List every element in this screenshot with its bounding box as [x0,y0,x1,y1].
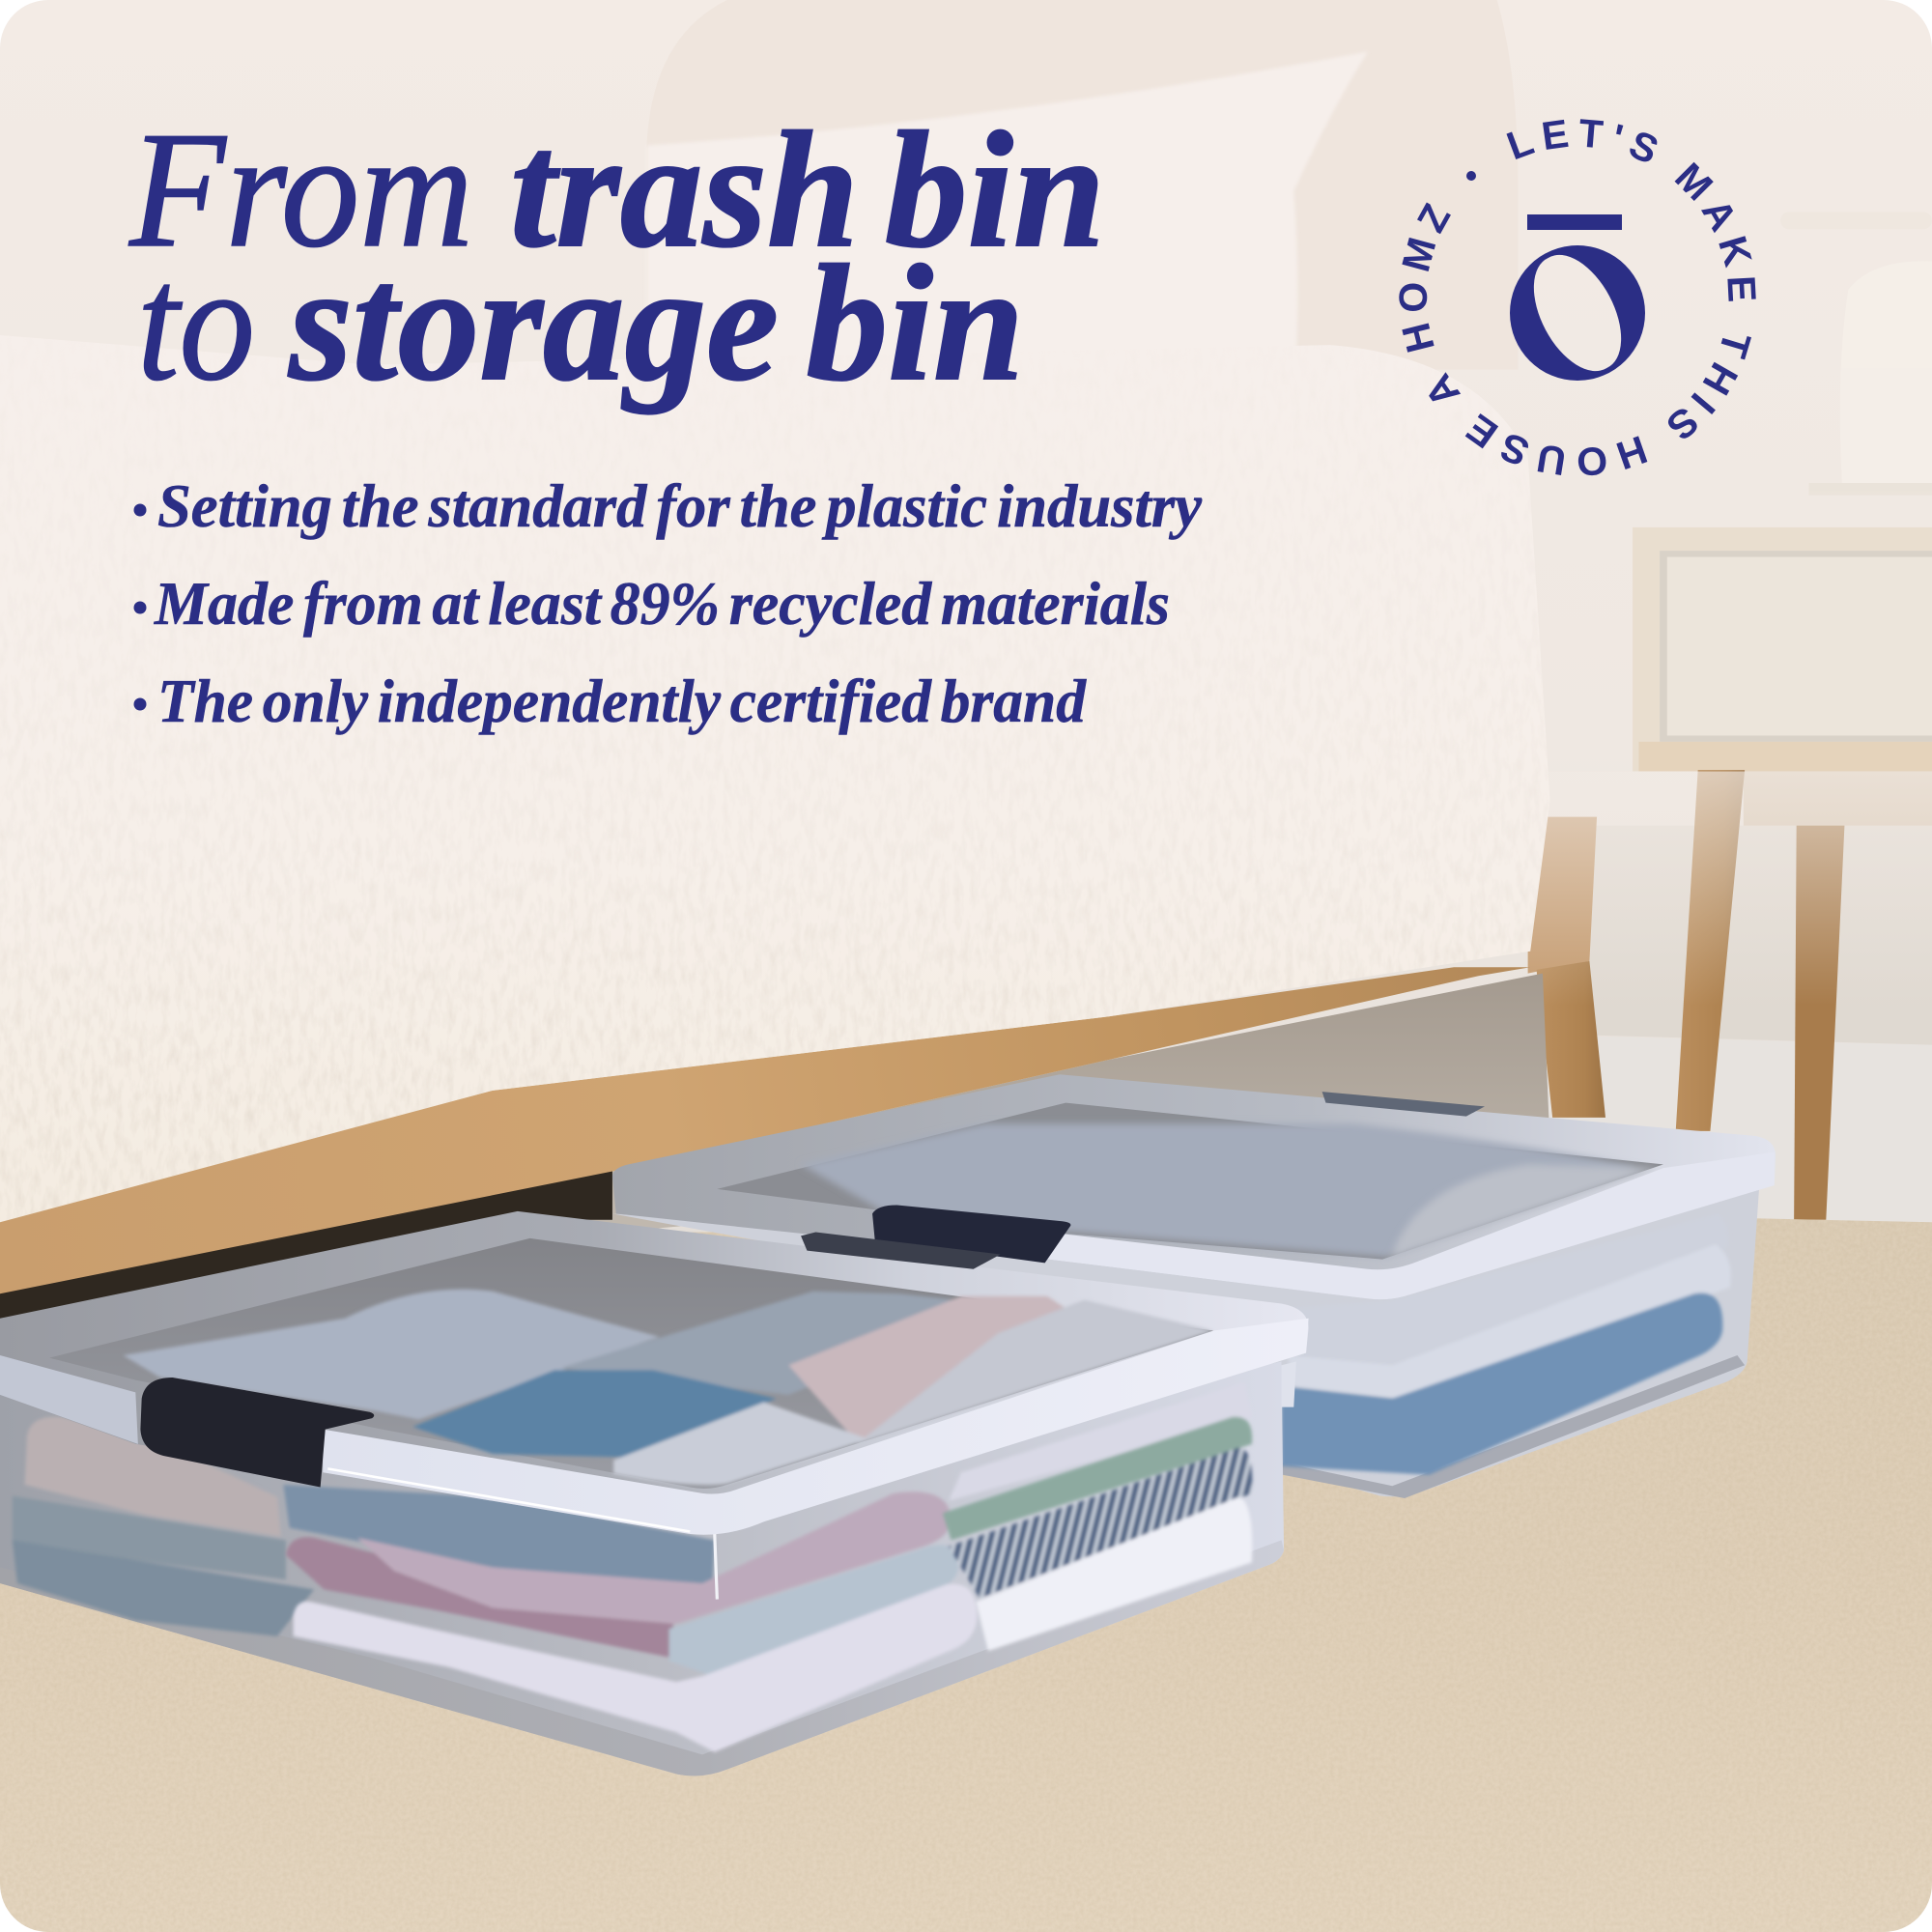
logo badge [1399,119,1756,475]
title: storage bin [288,232,1024,415]
right bin clothes [1282,1213,1731,1475]
bullet: recycled materials: Made from at least 89% recycled materials [154,569,1170,638]
dark gap under the bed rail [0,1167,612,1331]
title [128,99,1105,415]
right bin clasps [872,1205,1070,1263]
nightstand [1633,527,1932,1220]
right storage bin [612,1074,1776,1498]
headboard [647,0,1518,370]
baseboard [1528,1035,1932,1233]
left bin body [0,1350,1284,1776]
middle stack of clothes [283,1485,977,1752]
lamp [1808,483,1932,495]
left bin lid window [49,1238,1213,1489]
wall shadow above baseboard [1590,872,1932,1045]
left stack of clothes [13,1417,314,1636]
title: trash bin [510,99,1105,282]
bed frame side and leg [1528,817,1605,1118]
bullet: certified brand: The only independently certified brand [157,667,1087,735]
bullet: setting the standard: Setting the standard for the plastic industry [157,471,1203,540]
circular slogan: LET'S MAKE THIS HOUSE A HOMZ [1399,119,1756,475]
left bin lid [0,1211,1309,1535]
bullet list [133,471,1203,735]
logo mark [1510,214,1645,381]
left bin left rim [0,1355,138,1444]
title: From [128,99,473,282]
folded clothes seen through lid [124,1290,1213,1485]
blanket [0,332,1552,1233]
carpet [0,1208,1932,1932]
pillow [647,52,1368,370]
title: to [137,232,255,415]
left bin floor rim [0,1540,1284,1776]
left bin front rim [323,1319,1309,1535]
left storage bin [0,1211,1309,1776]
bed rail [0,967,1530,1293]
right stack of clothes [943,1382,1252,1651]
soft white veil over furniture legs [1528,771,1932,1006]
right bin lid [612,1074,1776,1299]
right bin body [612,1182,1759,1496]
right bin folded blanket under lid [801,1123,1638,1257]
under-bed wall in shadow [588,974,1549,1229]
wall [0,0,1932,1244]
right bin front rim [1047,1152,1775,1299]
left bin clasps [140,1378,374,1488]
